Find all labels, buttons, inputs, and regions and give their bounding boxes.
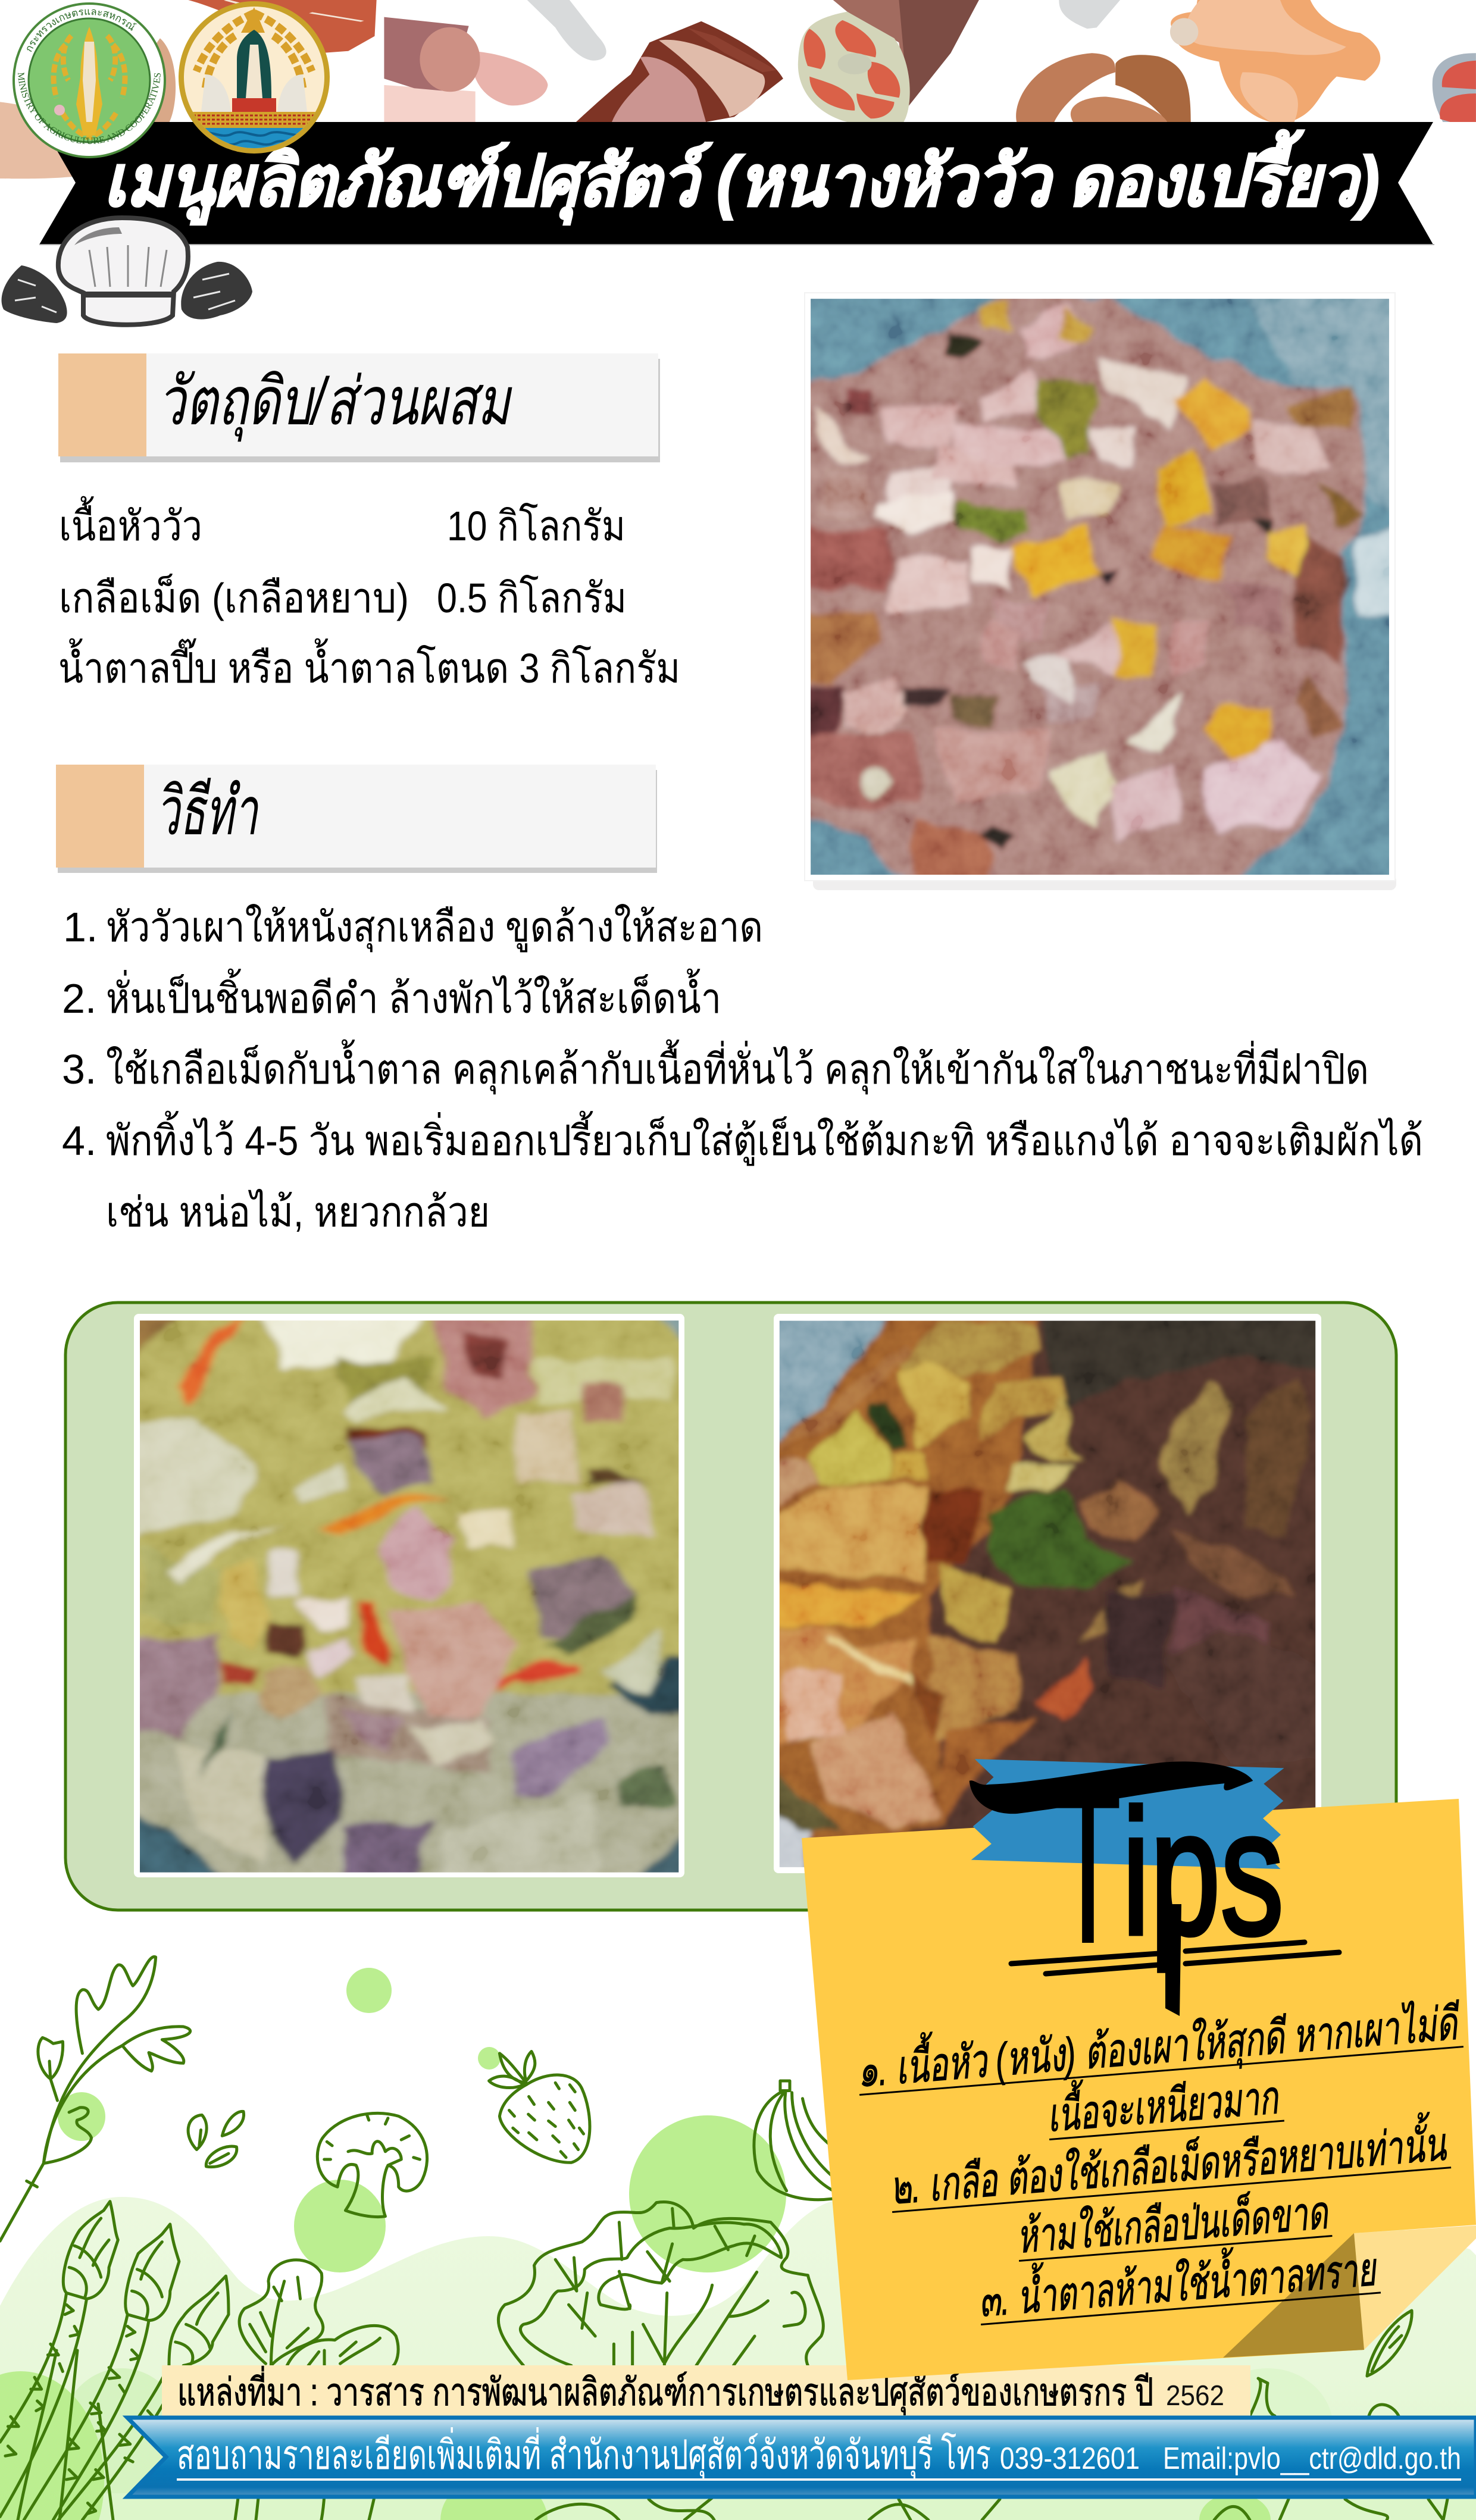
chicken leg [1170,0,1380,122]
method steps [62,903,1423,1235]
cut roast [798,0,979,122]
tip line 4: ห้ามใช้เกลือป่นเด็ดขาด [1015,2185,1331,2263]
heading: method [56,765,657,873]
light green hills [0,2197,1476,2520]
left dark meat [2,265,67,323]
tip line 2: เนื้อจะเหนียวมาก [1045,2064,1281,2142]
vegetable stems below ribbon and small leaf [18,2311,1447,2520]
step 2: 2. [62,975,96,1022]
tip line 4 [1015,2184,1333,2263]
heading text: วัตถุดิบ/ส่วนผสม [158,364,512,442]
tip line 2 [1045,2064,1284,2142]
ingredient 1: 10 กิโลกรัม [447,502,626,549]
ingredient 2 [59,574,627,621]
ingredient 1 [59,496,626,549]
photo: soup with coconut milk [48,1265,763,1929]
contact ribbon [127,2418,1476,2497]
light green dots [0,1968,1271,2520]
heading: ingredients [58,353,660,462]
step 3: 3. [62,1046,96,1092]
salami [384,17,548,122]
contact text: สอบถามรายละเอียดเพิ่มเติมที่ สำนักงานปศุสัตว์จังหวัดจันทบุรี โทร [177,2427,991,2480]
ingredient list [58,496,680,691]
seal: ministry of agriculture: MINISTRY OF AGRICULTURE AND COOPERATIVES [18,73,161,144]
title text: เมนูผลิตภัณฑ์ปศุสัตว์ (หนางหัววัว ดองเปรี้ยว) [104,130,1380,225]
photo: pickled beef skin in bowl [759,247,1444,932]
seal: ministry of agriculture: กระทรวงเกษตรและสหกรณ์ [27,10,137,52]
ingredient 2: เกลือเม็ด (เกลือหยาบ) [59,574,409,621]
step 1: หัววัวเผาให้หนังสุกเหลือง ขูดล้างให้สะอาด [106,903,763,953]
grey decorative strokes [527,0,1120,61]
green photo panel [48,1265,1396,1929]
ingredient 1: เนื้อหัววัว [59,496,202,549]
right dark meat [181,262,252,320]
tips wordmark: T [1055,1742,1121,1988]
tips wordmark [970,1742,1339,2016]
line art vegetables [0,1956,833,2520]
hat [58,218,188,325]
seal: ministry of agriculture [12,2,166,158]
tips sticky note [802,1742,1476,2380]
sausages [1016,53,1191,122]
step 2: หั่นเป็นชิ้นพอดีคำ ล้างพักไว้ให้สะเด็ดน้ำ [106,968,721,1022]
source text: แหล่งที่มา : วารสาร การพัฒนาผลิตภัณฑ์การเกษตรและปศุสัตว์ของเกษตรกร ปี [177,2366,1153,2415]
step 1: 1. [63,904,98,950]
ham [576,21,783,122]
step 4 continued: เช่น หน่อไม้, หยวกกล้วย [106,1189,490,1235]
photo: curry dish [732,1273,1364,1917]
ingredient 2: 0.5 กิโลกรัม [437,574,627,621]
heading text: วิธีทำ [156,774,259,849]
chef hat with meat [2,218,252,325]
phone number: 039-312601 [1000,2441,1140,2476]
header meat illustrations [0,0,1476,179]
source year: 2562 [1166,2380,1224,2412]
step 4: 4. [62,1117,96,1164]
vegetable background illustration [0,1956,1476,2520]
note body [802,1799,1476,2380]
title ribbon [39,122,1434,245]
tips wordmark: ips [1122,1772,1284,1973]
source credit bar [162,2365,1250,2419]
steak behind seals [188,0,377,53]
right steak [1432,53,1476,122]
blue tape [971,1759,1284,1869]
ingredient 3: น้ำตาลปี๊บ หรือ น้ำตาลโตนด 3 กิโลกรัม [58,638,680,691]
note fold flap [1354,2225,1476,2350]
left meat piece [0,102,113,179]
seal: department of livestock [179,0,333,155]
